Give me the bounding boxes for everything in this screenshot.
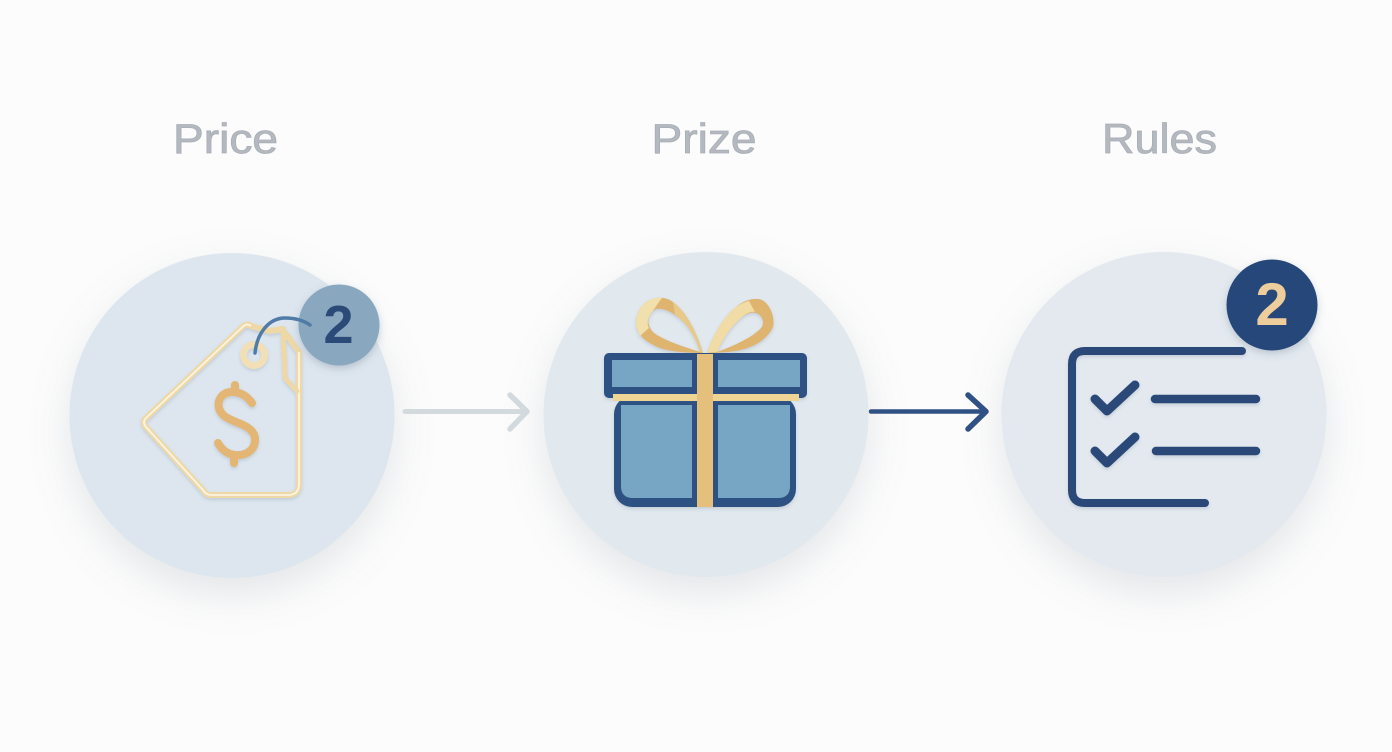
heading: Rules: Rules — [1102, 115, 1217, 162]
icon: price tag — [144, 325, 299, 495]
checklist frame — [1072, 351, 1242, 503]
badge: price step number — [298, 284, 380, 366]
left loop inner strand — [673, 302, 703, 353]
check one — [1095, 385, 1135, 411]
arrow: price to prize — [405, 395, 527, 429]
tag hole — [244, 344, 264, 366]
box body — [614, 396, 796, 507]
box lid — [604, 353, 807, 398]
left loop — [636, 298, 703, 353]
box right panel — [718, 405, 790, 498]
tag outline highlight — [144, 325, 299, 495]
bow — [636, 298, 774, 353]
right loop highlight — [707, 301, 755, 353]
badge: price step number: 2 — [323, 295, 354, 355]
icon: gift box — [604, 298, 807, 507]
vertical ribbon — [697, 354, 713, 507]
heading: Prize: Prize — [652, 115, 756, 162]
heading: Price: Price — [173, 115, 278, 162]
line one — [1155, 395, 1256, 403]
lid right panel — [718, 360, 800, 387]
icon: checklist — [1072, 351, 1256, 503]
lid left panel — [612, 360, 692, 387]
arrow: prize to rules — [871, 395, 986, 429]
panel: rules circle — [1002, 252, 1326, 577]
tag fold — [283, 329, 297, 391]
horizontal ribbon — [613, 394, 799, 401]
badge: rules step number — [1226, 260, 1318, 350]
panel: price circle — [70, 253, 394, 578]
panel: prize circle — [544, 252, 868, 577]
dollar sign — [218, 385, 255, 463]
box left panel — [621, 405, 692, 498]
tag string — [255, 318, 310, 353]
badge: rules step number: 2 — [1255, 271, 1289, 338]
line two — [1156, 447, 1256, 455]
check two — [1095, 437, 1135, 463]
right loop — [707, 299, 774, 353]
left loop highlight — [636, 298, 662, 336]
tag outline — [144, 325, 299, 495]
